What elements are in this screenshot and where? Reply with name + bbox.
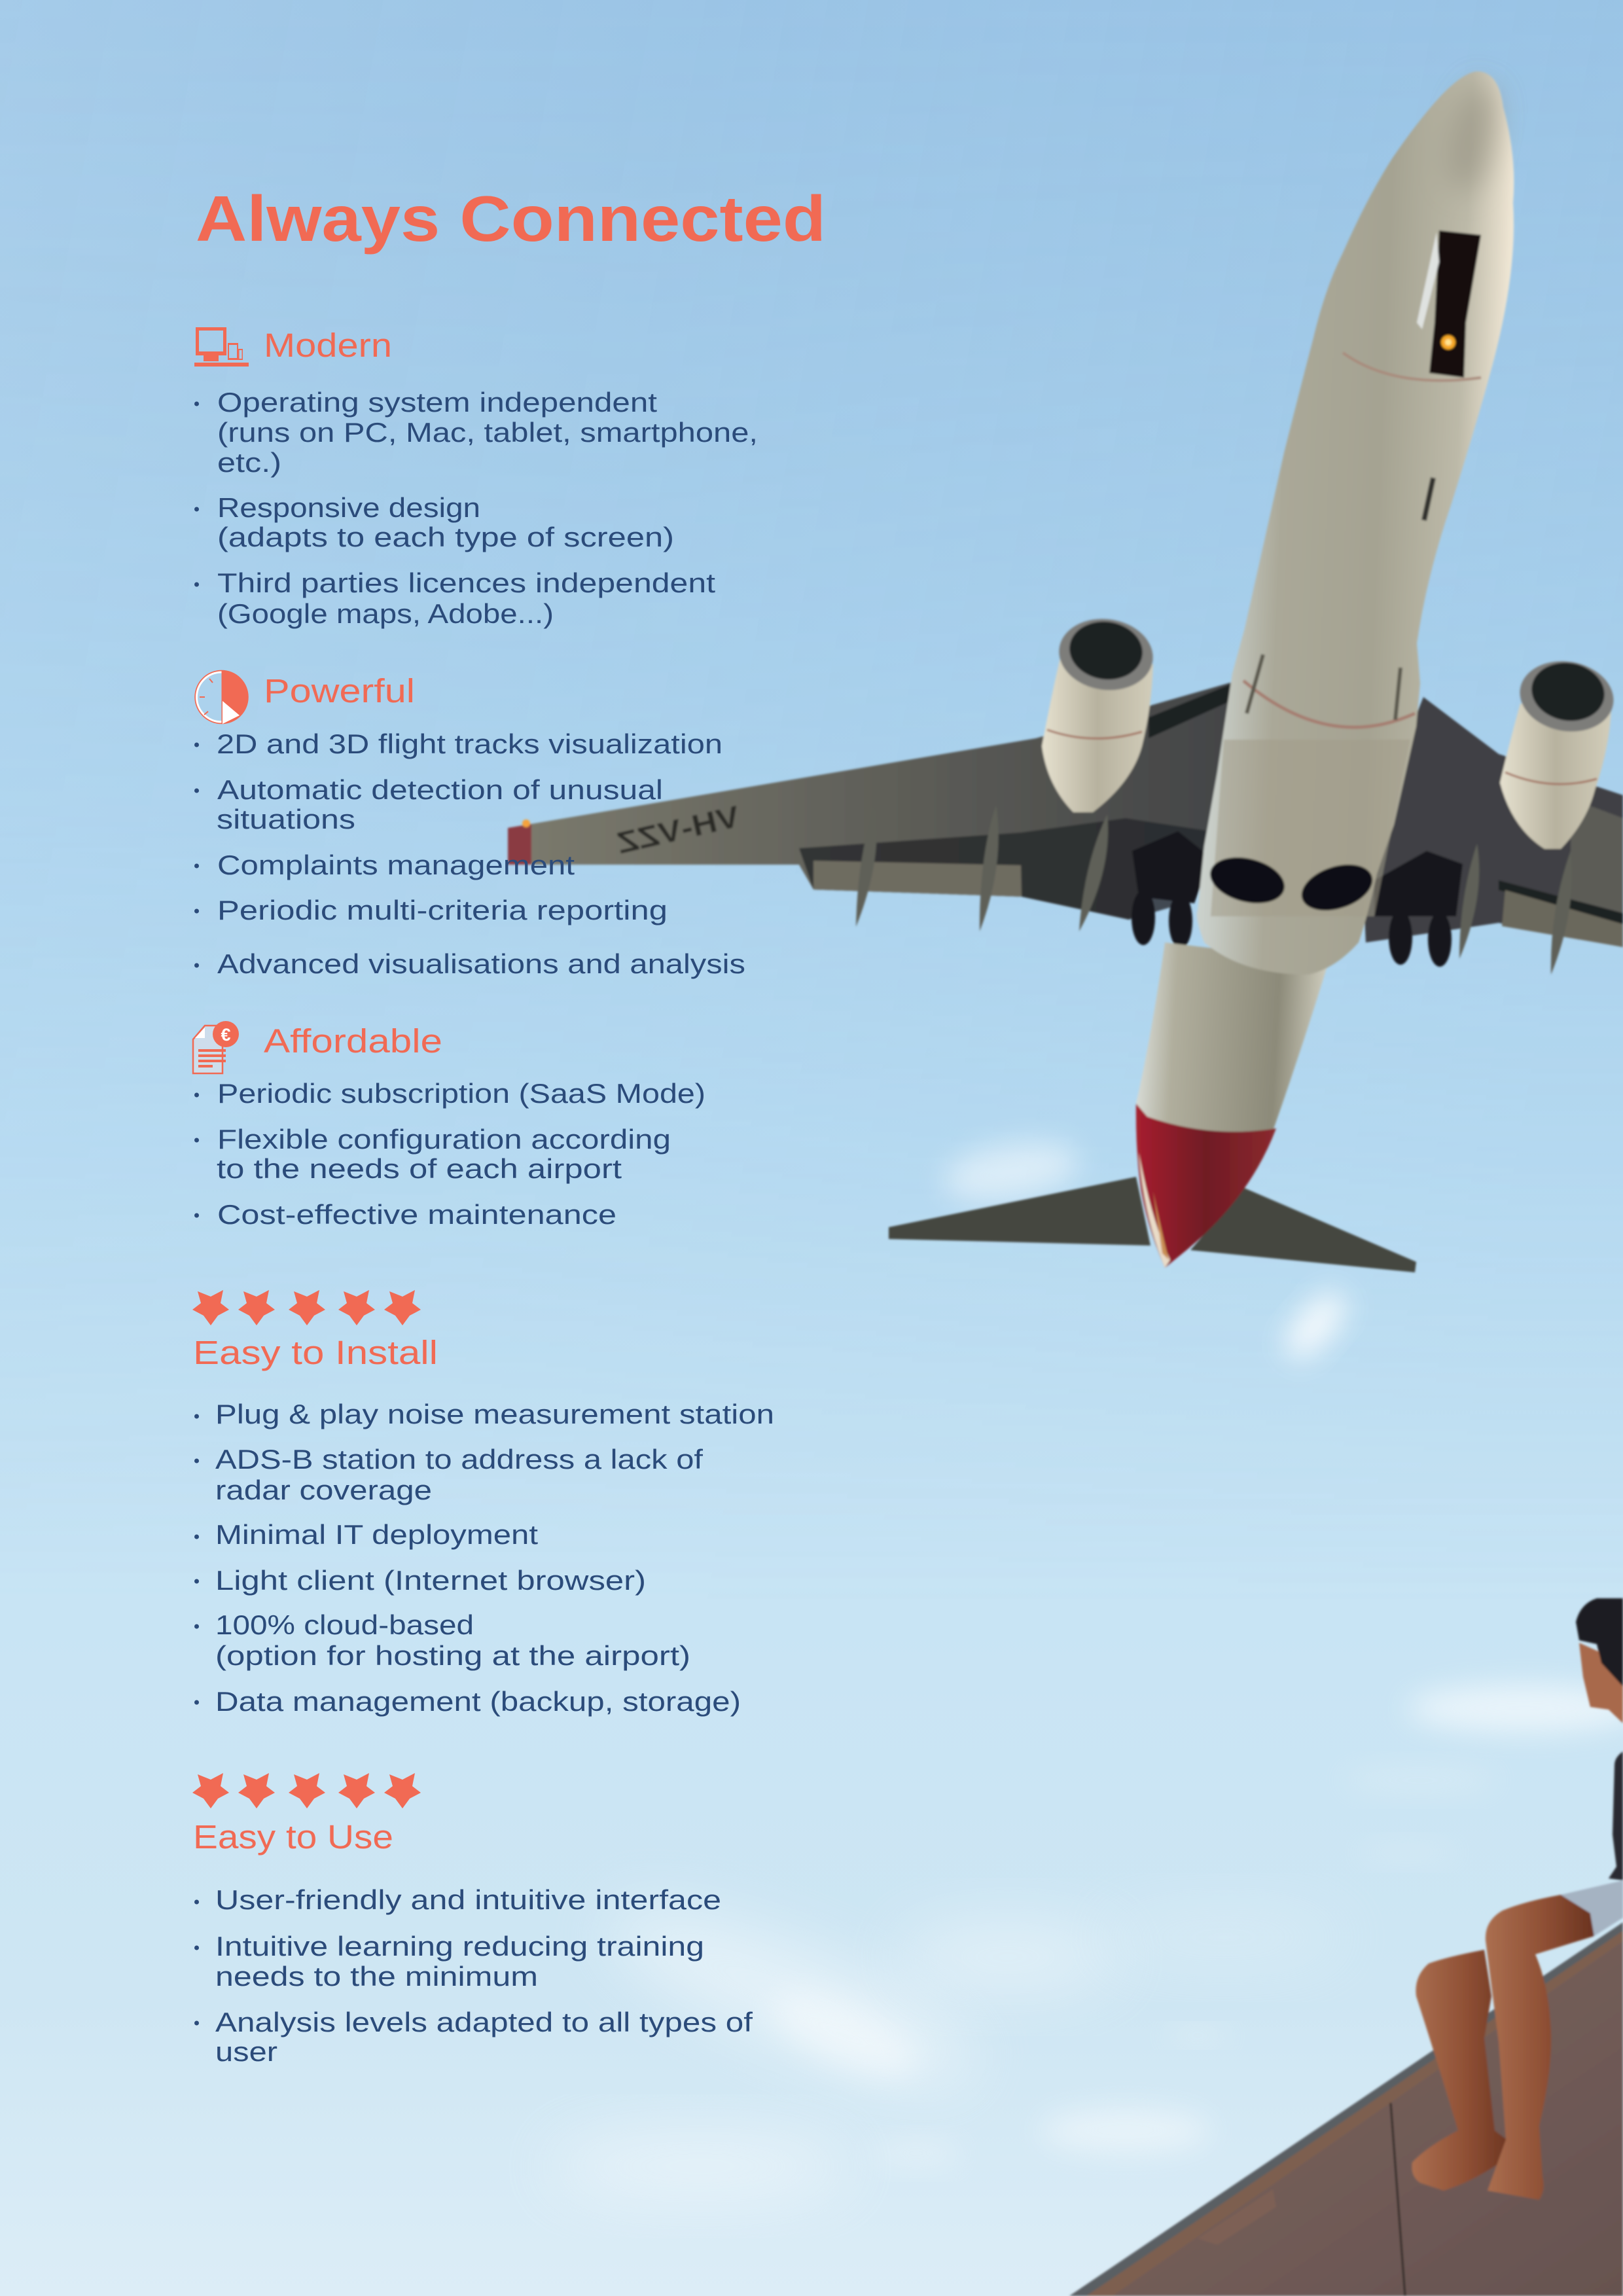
bullet list: (adapts to each type of screen) xyxy=(217,522,674,552)
bullet list: etc.) xyxy=(217,447,281,478)
bullet list: Responsive design xyxy=(217,492,480,523)
bullet list: (Google maps, Adobe...) xyxy=(217,598,554,629)
left wing xyxy=(508,679,1276,920)
bullet list: Periodic subscription (SaaS Mode) xyxy=(217,1078,705,1109)
bullet list: user xyxy=(215,2036,277,2067)
bullet list: Intuitive learning reducing training xyxy=(215,1931,704,1962)
bullet list: Plug & play noise measurement station xyxy=(215,1399,774,1429)
bullet list: 100% cloud-based xyxy=(215,1609,474,1640)
section: Modern xyxy=(194,327,758,629)
rear fuselage xyxy=(1136,942,1329,1268)
bullet list: Light client (Internet browser) xyxy=(215,1565,646,1596)
bullet list: Cost-effective maintenance xyxy=(217,1199,616,1230)
clouds xyxy=(550,1132,1623,2199)
bullet list: Flexible configuration according xyxy=(217,1124,671,1155)
fuselage xyxy=(1197,71,1514,975)
man: head xyxy=(1576,1598,1623,1723)
bullet list: Periodic multi-criteria reporting xyxy=(217,895,668,925)
icon: five stars xyxy=(192,1773,421,1808)
bullet list xyxy=(194,1078,705,1230)
bullet list: (runs on PC, Mac, tablet, smartphone, xyxy=(217,417,758,448)
man: rear leg xyxy=(1412,1950,1513,2191)
heading: Powerful xyxy=(264,672,415,709)
section: Easy to Install xyxy=(192,1290,774,1717)
man: front leg xyxy=(1486,1895,1594,2200)
icon: computer and devices xyxy=(194,327,249,367)
bullet list: 2D and 3D flight tracks visualization xyxy=(217,728,722,759)
bullet list xyxy=(194,387,758,629)
bullet list: to the needs of each airport xyxy=(217,1153,622,1184)
nose gear well xyxy=(1417,230,1481,378)
title: Always Connected xyxy=(196,183,826,255)
flap fairings xyxy=(856,805,1572,975)
section: Powerful xyxy=(194,670,745,979)
heading: Modern xyxy=(264,327,392,364)
man: shorts xyxy=(1561,1880,1623,1936)
bullet list: Third parties licences independent xyxy=(217,567,715,598)
icon: invoice with euro: € xyxy=(221,1025,231,1045)
bullet list: Advanced visualisations and analysis xyxy=(217,948,745,979)
horizontal stabilizers xyxy=(889,1177,1416,1272)
bullet list: (option for hosting at the airport) xyxy=(215,1640,690,1671)
bullet list: User-friendly and intuitive interface xyxy=(215,1884,721,1915)
ramp and sitting man photo xyxy=(1069,1598,1623,2296)
tail cone red xyxy=(1136,1103,1276,1268)
bullet list xyxy=(194,1884,753,2067)
heading: Affordable xyxy=(264,1022,442,1060)
bullet list: Complaints management xyxy=(217,850,575,880)
bullet list: radar coverage xyxy=(215,1475,432,1505)
bullet list: Operating system independent xyxy=(217,387,657,418)
right engine xyxy=(1500,654,1619,849)
right wing xyxy=(1361,697,1623,947)
bullet list: ADS-B station to address a lack of xyxy=(215,1444,703,1475)
bullet list: situations xyxy=(217,804,355,834)
fuselage panel shading xyxy=(1211,79,1506,916)
man: shirt xyxy=(1609,1751,1623,1880)
bullet list xyxy=(194,1399,774,1717)
wheel wells xyxy=(1205,850,1378,919)
bullet list: Minimal IT deployment xyxy=(215,1519,538,1550)
airplane photo xyxy=(508,71,1623,1272)
left engine xyxy=(1042,613,1158,812)
bullet list: Automatic detection of unusual xyxy=(217,774,663,805)
landing gear xyxy=(1132,831,1463,967)
icon: five stars xyxy=(192,1290,421,1325)
icon: invoice with euro xyxy=(193,1021,239,1073)
bullet list: needs to the minimum xyxy=(215,1961,538,1992)
bullet list xyxy=(194,728,745,979)
skate ramp xyxy=(1069,1922,1623,2296)
bullet list: Data management (backup, storage) xyxy=(215,1686,741,1717)
bullet list: Analysis levels adapted to all types of xyxy=(215,2007,753,2037)
heading: Easy to Install xyxy=(193,1334,438,1371)
icon: gauge xyxy=(195,670,248,724)
registration mark: VH-VZZ xyxy=(614,799,743,860)
section: Affordable xyxy=(193,1021,705,1230)
section: Easy to Use xyxy=(192,1773,753,2067)
heading: Easy to Use xyxy=(193,1818,393,1856)
